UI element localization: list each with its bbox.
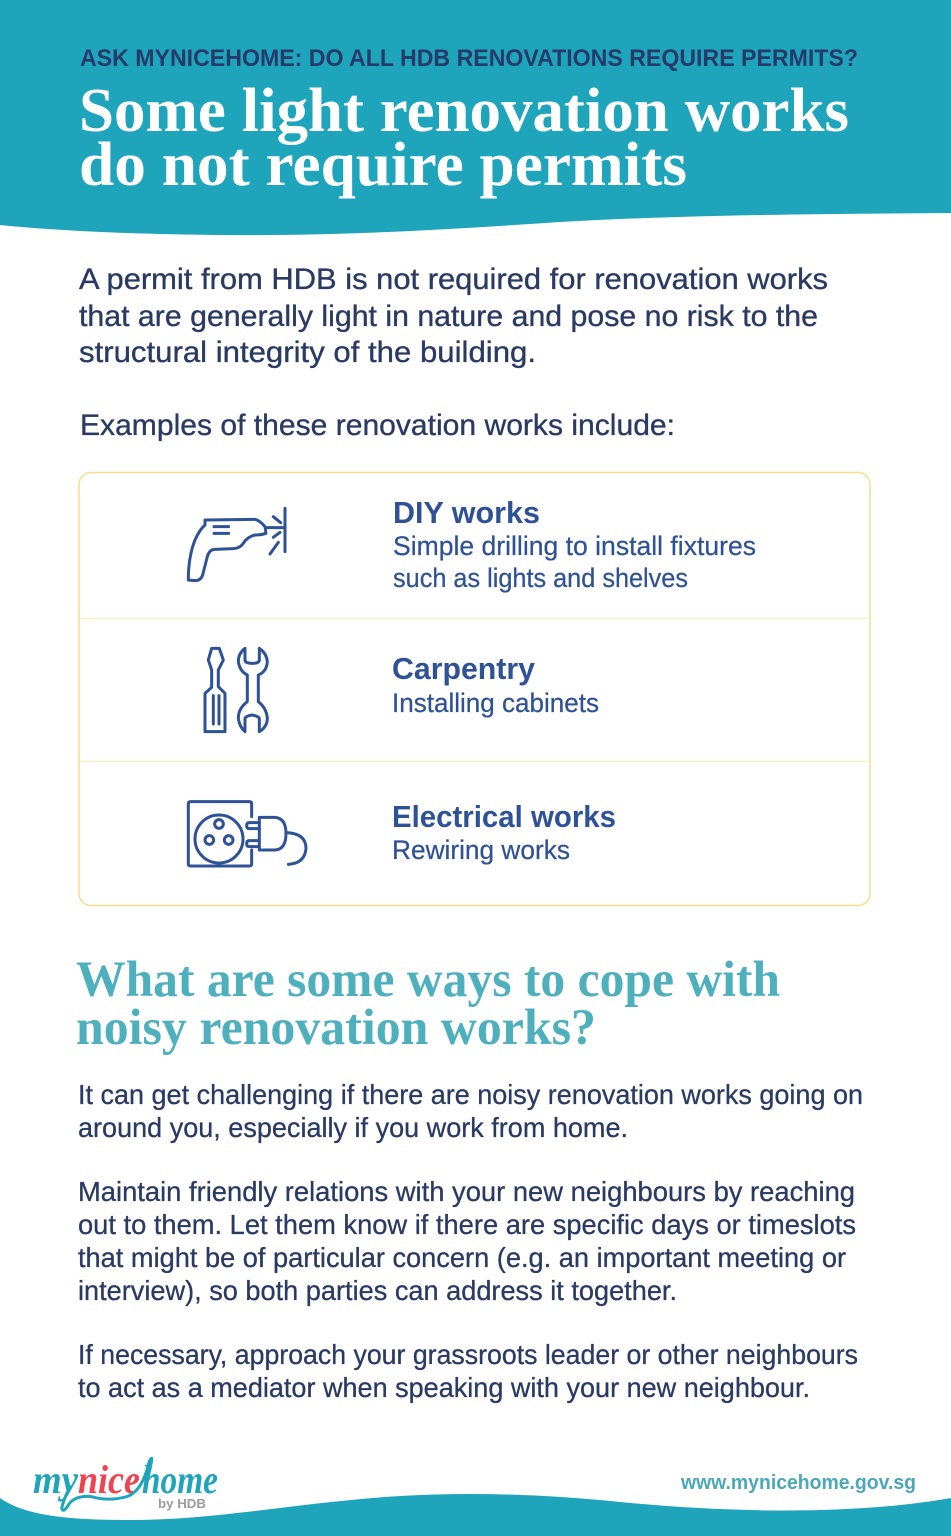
DIY works text: such as lights and shelves (393, 563, 688, 593)
title: Some light renovation works (79, 77, 849, 145)
Carpentry text: Installing cabinets (392, 688, 599, 718)
Carpentry text (392, 651, 599, 718)
paragraph: mediator: If necessary, approach your grassroots leader or other neighbours (78, 1339, 858, 1370)
icon: socket and plug (188, 802, 306, 866)
intro text: A permit from HDB is not required for renovation works (79, 263, 828, 296)
title (79, 77, 849, 199)
logo: mynicehome by HDB: my (33, 1457, 78, 1502)
Carpentry text: Carpentry (392, 651, 536, 686)
Electrical works text: Electrical works (392, 799, 616, 834)
logo: mynicehome by HDB: home (142, 1457, 218, 1502)
examples lead-in: Examples of these renovation works include: (80, 409, 675, 442)
website URL: www.mynicehome.gov.sg (680, 1471, 916, 1494)
DIY works text (393, 495, 756, 593)
paragraph: friendly relations: that might be of particular concern (e.g. an important meeting or (78, 1242, 846, 1273)
intro text: that are generally light in nature and pose no risk to the (79, 300, 818, 333)
paragraph: friendly relations: interview), so both parties can address it together. (78, 1275, 677, 1306)
paragraph: noisy works (78, 1079, 863, 1143)
icon: drill (188, 508, 285, 581)
Electrical works text: Rewiring works (392, 835, 570, 865)
eyebrow heading: ASK MYNICEHOME: DO ALL HDB RENOVATIONS REQUIRE PERMITS? (80, 45, 858, 72)
header banner (0, 0, 951, 235)
DIY works text: DIY works (393, 495, 540, 530)
paragraph: friendly relations: Maintain friendly relations with your new neighbours by reaching (78, 1176, 855, 1207)
intro text (79, 263, 828, 369)
paragraph: noisy works: It can get challenging if there are noisy renovation works going on (78, 1079, 863, 1110)
logo: mynicehome by HDB: by HDB (158, 1496, 206, 1511)
footer wave (0, 1494, 951, 1536)
section heading: noisy renovation works? (76, 1000, 596, 1056)
panel: examples of renovation works (79, 472, 870, 906)
paragraph: mediator (78, 1339, 858, 1403)
section heading: What are some ways to cope with (76, 952, 780, 1008)
logo: mynicehome by HDB (33, 1457, 218, 1511)
paragraph: mediator: to act as a mediator when speaking with your new neighbour. (78, 1372, 810, 1403)
logo: mynicehome by HDB: nice (78, 1457, 140, 1502)
DIY works text: Simple drilling to install fixtures (393, 531, 756, 561)
intro text: structural integrity of the building. (79, 336, 536, 369)
section heading (76, 952, 780, 1056)
icon: screwdriver and wrench (205, 648, 267, 732)
paragraph: noisy works: around you, especially if you work from home. (78, 1112, 628, 1143)
Electrical works text (392, 799, 616, 865)
paragraph: friendly relations: out to them. Let them know if there are specific days or timeslots (78, 1209, 856, 1240)
title: do not require permits (79, 131, 687, 199)
paragraph: friendly relations (78, 1176, 856, 1306)
